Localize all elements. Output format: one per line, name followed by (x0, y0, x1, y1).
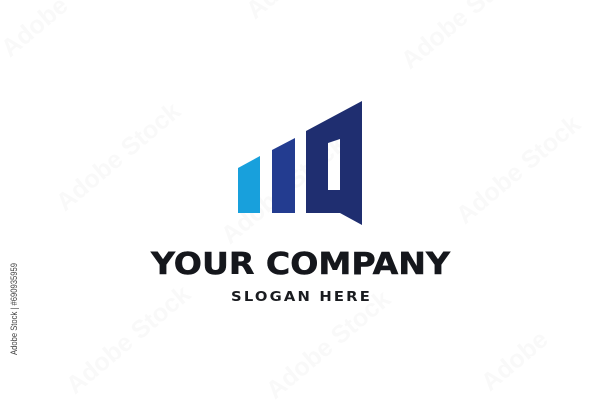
stock watermarks: Adobe Stock (61, 280, 196, 400)
stock credit: Adobe Stock | #690935959 (9, 263, 20, 355)
company name: YOUR COMPANY (150, 247, 451, 282)
stock watermarks: Adobe (476, 325, 554, 397)
light blue bar (238, 156, 260, 213)
medium blue bar (272, 138, 295, 213)
stock watermarks: Adobe Stock (216, 130, 351, 250)
navy speech-bubble bar with window (306, 101, 362, 225)
stock watermarks: Adobe Stock (51, 97, 186, 217)
logo mark: rising bars (238, 101, 362, 225)
stock watermarks: Adobe Stock (451, 110, 586, 230)
slogan: SLOGAN HERE (231, 289, 372, 305)
